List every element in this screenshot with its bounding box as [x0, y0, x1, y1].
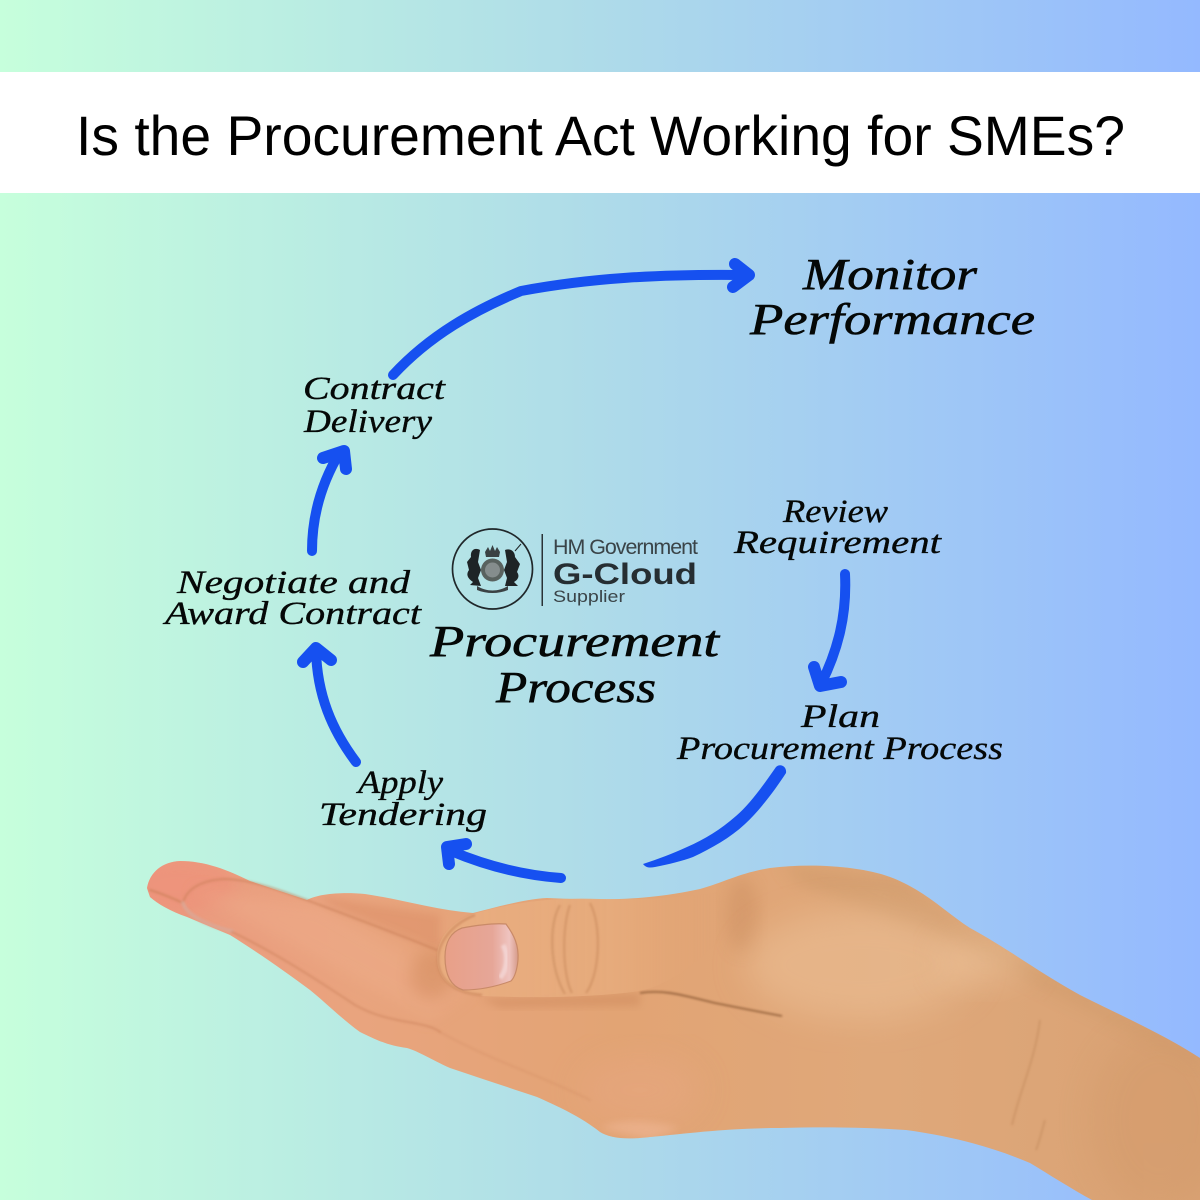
- arrow: contract delivery to monitor performance: [393, 264, 749, 375]
- label: Plan Procurement Process: Procurement Process: [676, 731, 1003, 767]
- label: Contract Delivery: [303, 371, 446, 440]
- arrow segment: plan procurement tail: [643, 765, 786, 868]
- hand shading: [147, 861, 1200, 1138]
- label: Negotiate and Award Contract: [163, 565, 422, 632]
- thumb: [437, 892, 720, 997]
- label: Negotiate and Award Contract: Award Contract: [163, 596, 422, 632]
- text: Supplier: Supplier: [553, 588, 626, 606]
- title band: [0, 72, 1200, 193]
- label: Apply Tendering: Tendering: [319, 797, 487, 833]
- wrist creases: [1012, 1020, 1045, 1150]
- icon: thumb nail: [445, 924, 518, 990]
- thumb crease: [640, 992, 782, 1016]
- title: Is the Procurement Act Working for SMEs?: [76, 104, 1125, 167]
- arrow: apply tendering to negotiate: [303, 648, 356, 762]
- icon: royal coat of arms roundel: [452, 529, 532, 609]
- hand: [125, 855, 1200, 1200]
- arrow: negotiate to contract delivery: [312, 451, 346, 551]
- hand silhouette: [140, 855, 1200, 1200]
- label: Procurement Process: Procurement: [429, 617, 721, 666]
- label: Monitor Performance: [749, 250, 1035, 344]
- label: Apply Tendering: Apply: [356, 765, 443, 801]
- label: Contract Delivery: Contract: [303, 371, 446, 407]
- label: Plan Procurement Process: Plan: [800, 699, 880, 735]
- divider: [542, 534, 543, 606]
- arrow: review to plan: [814, 574, 845, 686]
- label: Review Requirement: [733, 494, 942, 561]
- arrow: plan to apply tendering: [447, 844, 561, 878]
- label: Monitor Performance: Monitor: [802, 250, 978, 299]
- label: Procurement Process: Process: [495, 663, 656, 712]
- label: Contract Delivery: Delivery: [303, 404, 432, 440]
- label: Plan Procurement Process: [676, 699, 1003, 767]
- text: G-Cloud: G-Cloud: [553, 558, 697, 591]
- text: HM Government: HM Government: [553, 536, 698, 559]
- label: Negotiate and Award Contract: Negotiate and: [176, 565, 411, 601]
- logo: HM Government G-Cloud Supplier: [452, 529, 698, 609]
- label: Review Requirement: Requirement: [733, 525, 942, 561]
- finger divisions: [150, 879, 590, 1100]
- label: Review Requirement: Review: [782, 494, 888, 530]
- label: Procurement Process: [429, 617, 721, 712]
- label: Apply Tendering: [319, 765, 487, 833]
- label: Monitor Performance: Performance: [749, 295, 1035, 344]
